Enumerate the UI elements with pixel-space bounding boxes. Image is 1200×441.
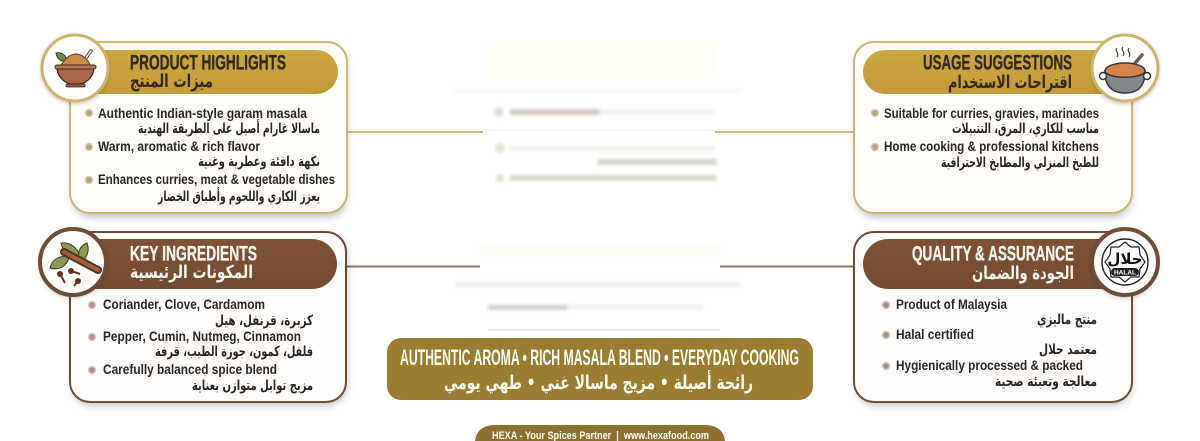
banner: tagline <box>387 338 813 400</box>
list: quality and assurance items: Product of Malaysia <box>896 297 1007 312</box>
icon: cinnamon, cardamom and cloves <box>39 229 107 298</box>
list: product highlights items <box>86 106 335 206</box>
list: product highlights items: Enhances curries, meat & vegetable dishes <box>98 172 335 187</box>
panel: product highlights <box>41 35 347 218</box>
heading: key ingredients: المكونات الرئيسية <box>130 262 253 283</box>
list: key ingredients items: Pepper, Cumin, Nutmeg, Cinnamon <box>103 329 301 344</box>
list: key ingredients items <box>88 297 314 394</box>
faded mirrored ghost panels in centre <box>455 43 740 330</box>
heading: product highlights: PRODUCT HIGHLIGHTS <box>130 52 286 74</box>
list: product highlights items: نكهة دافئة وعطرية وغنية <box>198 154 320 170</box>
icon: halal seal <box>1091 229 1159 298</box>
list: key ingredients items: مزيج توابل متوازن بعناية <box>192 378 313 394</box>
heading: usage suggestions: اقتراحات الاستخدام <box>948 72 1072 93</box>
icon: spice bowl <box>41 35 109 104</box>
list: quality and assurance items: منتج ماليزي <box>1037 312 1097 329</box>
list: product highlights items: Warm, aromatic & rich flavor <box>98 139 261 154</box>
banner: tagline: رائحة أصيلة • مزيج ماسالا غني • طهي يومي <box>444 370 753 394</box>
connector: top gold line <box>345 131 856 133</box>
list: product highlights items: Authentic Indian-style garam masala <box>98 106 307 121</box>
list: quality and assurance items: Hygienically processed & packed <box>896 358 1083 373</box>
heading: usage suggestions: USAGE SUGGESTIONS <box>923 52 1072 74</box>
icon: cooking pot <box>1091 35 1159 104</box>
list: usage suggestions items: Suitable for curries, gravies, marinades <box>884 106 1099 121</box>
banner: tagline: AUTHENTIC AROMA • RICH MASALA BLEND • EVERYDAY COOKING <box>400 345 799 370</box>
list: usage suggestions items: Home cooking & professional kitchens <box>884 139 1099 154</box>
list: key ingredients items: Coriander, Clove, Cardamom <box>103 297 265 312</box>
heading: quality and assurance <box>863 239 1110 289</box>
list: product highlights items: يعزز الكاري واللحوم وأطباق الخضار <box>157 187 320 206</box>
heading: quality and assurance: الجودة والضمان <box>972 263 1074 284</box>
list: quality and assurance items <box>882 297 1097 390</box>
panel: usage suggestions <box>854 35 1159 218</box>
list: quality and assurance items: معالجة وتعبئة صحية <box>995 374 1097 390</box>
list: key ingredients items: كزبرة، قرنفل، هيل <box>215 313 314 329</box>
list: quality and assurance items: Halal certified <box>896 327 974 342</box>
footer: brand strip <box>475 425 725 441</box>
list: key ingredients items: فلفل، كمون، جوزة الطيب، قرفة <box>155 344 313 360</box>
heading: quality and assurance: QUALITY & ASSURANCE <box>912 242 1074 266</box>
icon: halal seal: HALAL <box>1114 270 1136 276</box>
heading: key ingredients <box>90 239 337 289</box>
list: usage suggestions items: مناسب للكاري، المرق، التتبيلات <box>952 121 1099 138</box>
list: key ingredients items: Carefully balanced spice blend <box>103 362 277 377</box>
heading: product highlights <box>90 50 338 94</box>
heading: product highlights: ميزات المنتج <box>130 71 213 92</box>
icon: halal seal: حلال <box>1107 250 1143 268</box>
heading: usage suggestions <box>863 50 1110 94</box>
list: product highlights items: ماسالا غارام أصيل على الطريقة الهندية <box>138 119 320 137</box>
heading: key ingredients: KEY INGREDIENTS <box>130 242 257 266</box>
list: quality and assurance items: معتمد حلال <box>1039 342 1097 358</box>
panel: key ingredients <box>39 229 347 406</box>
connector: lower brown line <box>345 266 856 268</box>
list: usage suggestions items: للطبخ المنزلي والمطابخ الاحترافية <box>941 155 1099 171</box>
list: usage suggestions items <box>872 106 1099 171</box>
panel: quality and assurance <box>854 229 1159 406</box>
